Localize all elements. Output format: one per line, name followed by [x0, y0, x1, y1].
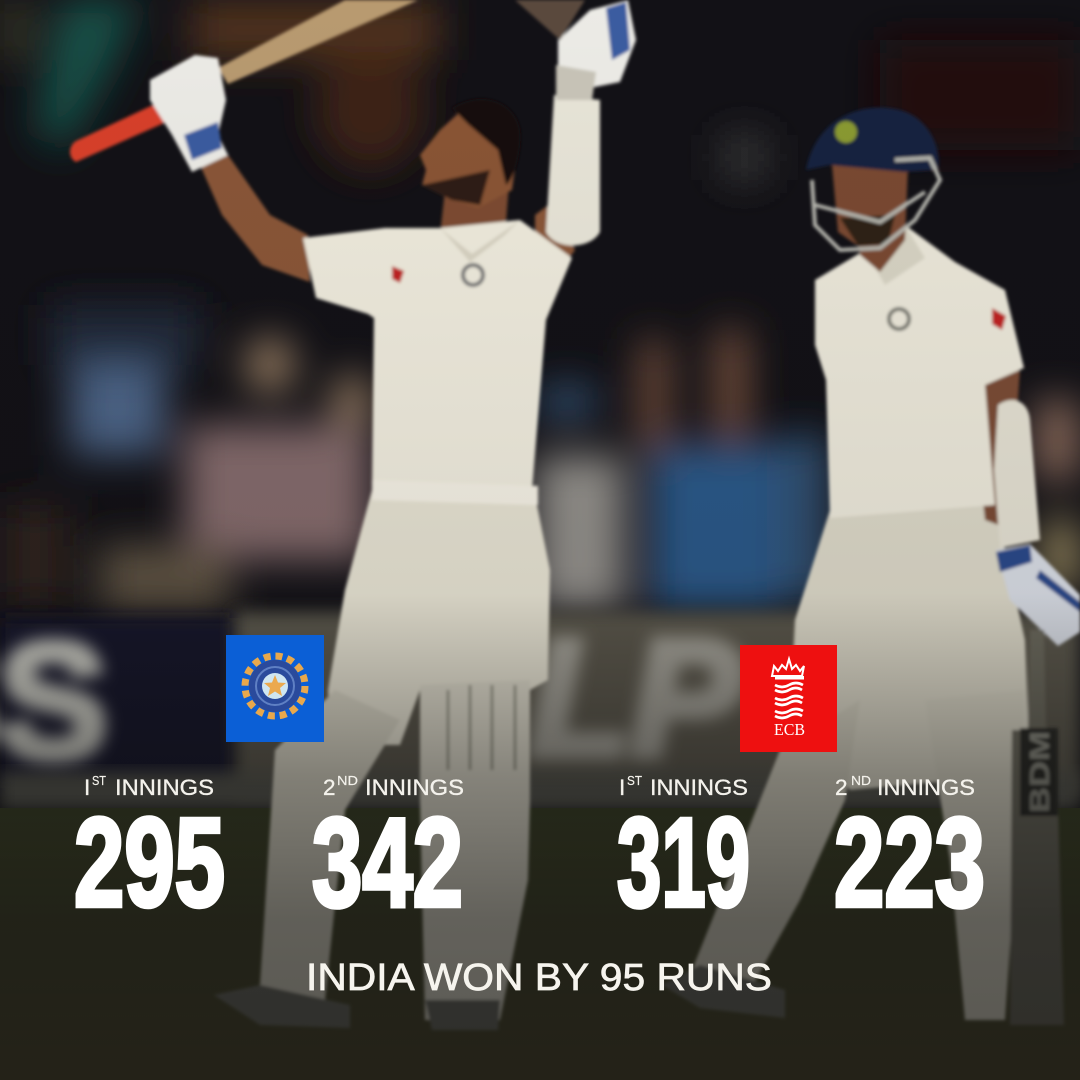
- logo: India BCCI crest: [226, 635, 324, 742]
- left leg pad: [260, 690, 400, 1000]
- collar and logos: [865, 225, 925, 285]
- India 2nd innings score: INNINGS: [365, 775, 464, 800]
- England 1st innings score: ST: [627, 773, 642, 788]
- shoe: [662, 965, 785, 1018]
- beard: [422, 170, 490, 205]
- India 1st innings score: 295: [74, 792, 225, 933]
- helmet: [806, 108, 939, 172]
- England 1st innings score: 319: [617, 792, 750, 933]
- arm guard: [994, 400, 1040, 548]
- bat blade: [218, 0, 418, 84]
- England 1st innings score: [617, 773, 750, 933]
- England 1st innings score: I: [619, 775, 625, 800]
- hair: [452, 99, 520, 185]
- India 1st innings score: I: [84, 775, 90, 800]
- India 1st innings score: ST: [92, 773, 106, 788]
- player: second batsman: [662, 108, 1080, 1025]
- crown: [772, 659, 804, 676]
- batting glove: [996, 544, 1080, 646]
- arm: [970, 370, 1020, 530]
- India 2nd innings score: ND: [337, 773, 358, 788]
- England 1st innings score: INNINGS: [650, 775, 748, 800]
- England 2nd innings score: 223: [834, 792, 985, 933]
- upper arm: [535, 200, 575, 285]
- bat handle: [70, 90, 198, 162]
- background: blurred crowd: [0, 0, 1080, 610]
- leg pads: [690, 700, 860, 990]
- result headline: INDIA WON BY 95 RUNS: [306, 957, 772, 999]
- background: pitch grass: [0, 808, 1080, 1080]
- helmet in hand: [515, 0, 585, 40]
- right leg pad: [420, 680, 530, 1020]
- trousers: [790, 505, 1030, 790]
- background: advertising hoarding: [0, 606, 1080, 810]
- shirt: [303, 220, 572, 505]
- India 2nd innings score: 342: [312, 792, 463, 933]
- player: second batsman: BDM: [1024, 731, 1055, 813]
- India 1st innings score: INNINGS: [115, 775, 214, 800]
- head and face: [420, 110, 520, 208]
- India 2nd innings score: 2: [323, 775, 336, 800]
- bat: [1010, 630, 1064, 1025]
- ECB wordmark: ECB: [774, 720, 805, 739]
- England 2nd innings score: ND: [851, 773, 871, 788]
- forearm guard: [546, 95, 600, 246]
- neck: [440, 170, 510, 258]
- India 1st innings score: [74, 773, 225, 933]
- shirt: [815, 225, 1024, 518]
- top glove: [558, 0, 636, 88]
- England 2nd innings score: [834, 773, 985, 933]
- shoes: [214, 985, 350, 1028]
- helmet grille: [812, 158, 940, 250]
- background: advertising hoarding: LP: [530, 606, 742, 790]
- raised arm left: [200, 155, 310, 282]
- logo: England ECB crest: [740, 645, 837, 752]
- India 2nd innings score: [312, 773, 464, 933]
- player: main batsman: [70, 0, 636, 1030]
- three lions: [775, 683, 803, 718]
- face and neck: [832, 165, 908, 272]
- left glove: [150, 55, 228, 172]
- England 2nd innings score: INNINGS: [877, 775, 975, 800]
- trousers: [328, 490, 550, 745]
- England 2nd innings score: 2: [835, 775, 848, 800]
